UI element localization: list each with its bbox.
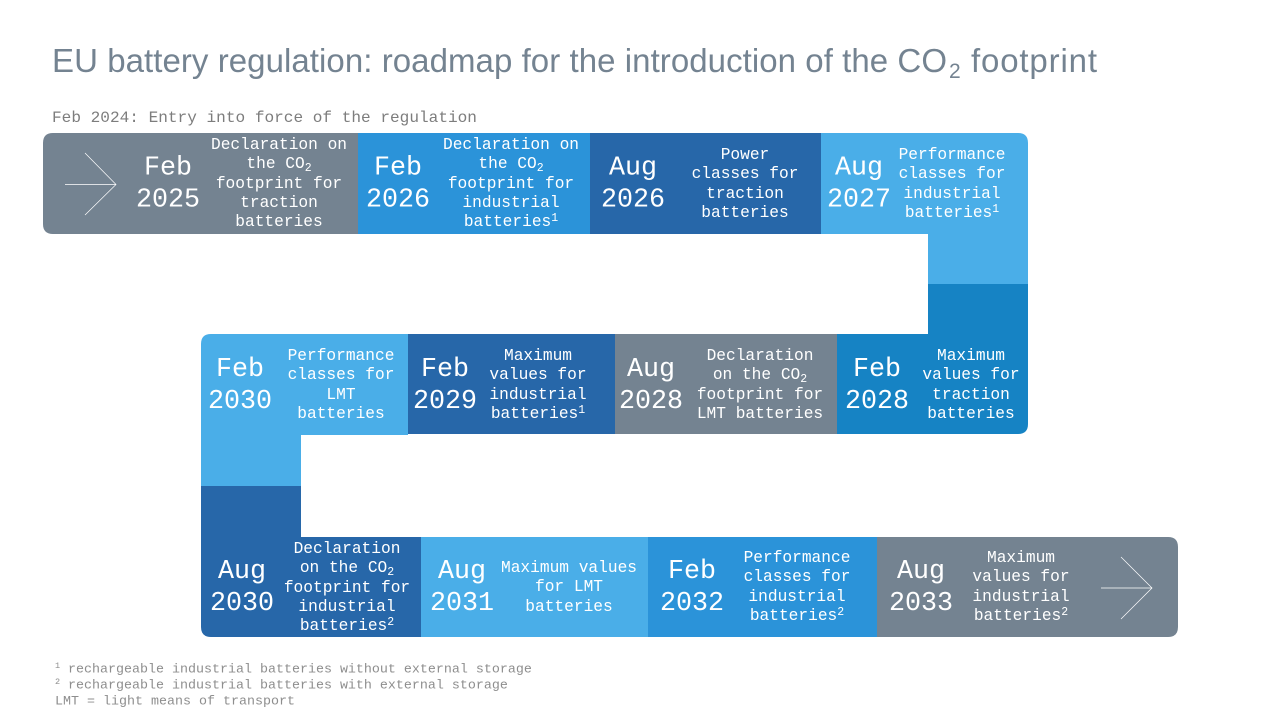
step: Feb 2026 industrial declaration: Declaration on: [443, 136, 579, 154]
step: Aug 2030 industrial declaration: 2: [387, 616, 394, 629]
step: Aug 2030 industrial declaration: industrial: [298, 598, 396, 616]
step: Feb 2026 industrial declaration: [358, 133, 590, 234]
step: Feb 2029 industrial maximum values: Maximum: [504, 347, 572, 365]
step: Aug 2028 LMT declaration: Aug: [627, 355, 675, 385]
step: Aug 2030 industrial declaration: 2030: [210, 589, 274, 619]
step: Aug 2033 industrial maximum values: industrial: [972, 588, 1070, 606]
description: Declaration on: [211, 136, 347, 154]
step: Aug 2033 industrial maximum values: 2: [1061, 606, 1068, 619]
footnotes: LMT = light means of transport: [55, 694, 295, 710]
step: Aug 2033 industrial maximum values: [877, 537, 1178, 637]
title: footprint: [971, 42, 1097, 79]
step: Feb 2029 industrial maximum values: industrial: [489, 386, 587, 404]
step: Aug 2027 industrial performance classes: classes for: [899, 165, 1005, 183]
title: 2: [949, 60, 961, 83]
description: traction: [240, 194, 318, 212]
step: Feb 2029 industrial maximum values: Feb: [421, 355, 469, 385]
step: Aug 2028 LMT declaration: 2: [800, 373, 807, 386]
description: the CO: [246, 155, 312, 175]
footnotes: 2: [55, 677, 60, 687]
step: Aug 2031 LMT maximum values: Maximum values: [501, 559, 637, 577]
step: Aug 2030 industrial declaration: footprint for: [284, 579, 410, 597]
step: Aug 2026 traction power classes: classes for: [692, 165, 798, 183]
step: Aug 2028 LMT declaration: LMT batteries: [697, 405, 823, 423]
step: Aug 2026 traction power classes: [590, 133, 821, 234]
step: Aug 2030 industrial declaration: Aug: [218, 557, 266, 587]
step: Feb 2030 LMT performance classes: Performance: [288, 347, 394, 365]
step: Aug 2028 LMT declaration: footprint for: [697, 386, 823, 404]
step: Feb 2029 industrial maximum values: [408, 334, 615, 434]
step: Aug 2027 industrial performance classes: Performance: [899, 146, 1005, 164]
footnotes: [55, 661, 532, 710]
step: Feb 2026 industrial declaration: 2: [537, 162, 544, 175]
step: Feb 2032 industrial performance classes: [648, 537, 877, 637]
step: Feb 2029 industrial maximum values: 1: [578, 404, 585, 417]
step: Feb 2030 LMT performance classes: Feb: [216, 355, 264, 385]
step: Aug 2030 industrial declaration: [201, 486, 421, 637]
step: Aug 2033 industrial maximum values: Maximum: [987, 549, 1055, 567]
step: Aug 2026 traction power classes: traction: [706, 185, 784, 203]
step: Feb 2032 industrial performance classes: industrial: [748, 588, 846, 606]
step: Feb 2028 traction maximum values: [837, 284, 1028, 434]
footnotes: rechargeable industrial batteries without external storage: [68, 662, 532, 678]
step: Feb 2028 traction maximum values: values for: [922, 366, 1020, 384]
step: Aug 2031 LMT maximum values: [421, 537, 648, 637]
step: Feb 2032 industrial performance classes: Feb: [668, 557, 716, 587]
description: 2: [305, 162, 312, 175]
step: Aug 2031 LMT maximum values: for LMT: [535, 578, 603, 596]
step: Aug 2030 industrial declaration: 2: [387, 566, 394, 579]
step: Feb 2026 industrial declaration: industrial: [462, 194, 560, 212]
step: Feb 2030 LMT performance classes: classes for: [288, 366, 394, 384]
step: Feb 2032 industrial performance classes: 2032: [660, 589, 724, 619]
title: EU battery regulation: roadmap for the introduction of the CO: [52, 42, 947, 79]
icon: end arrow: [1101, 557, 1152, 619]
step: Feb 2026 industrial declaration: footprint for: [448, 175, 574, 193]
step: Aug 2031 LMT maximum values: Aug: [438, 557, 486, 587]
step: Feb 2029 industrial maximum values: batteries: [491, 404, 585, 423]
step: Aug 2027 industrial performance classes: 2027: [827, 186, 891, 216]
step: Aug 2033 industrial maximum values: Aug: [897, 557, 945, 587]
step: Aug 2028 LMT declaration: on the CO: [713, 366, 807, 386]
subtitle: entry into force: Feb 2024: Entry into force of the regulation: [52, 109, 477, 127]
step: Aug 2033 industrial maximum values: values for: [972, 568, 1070, 586]
step: Aug 2028 LMT declaration: Declaration: [707, 347, 813, 365]
step: Aug 2027 industrial performance classes: 1: [992, 203, 999, 216]
step: Aug 2027 industrial performance classes: industrial: [903, 185, 1001, 203]
step: Feb 2029 industrial maximum values: values for: [489, 366, 587, 384]
step: Feb 2028 traction maximum values: batteries: [927, 405, 1015, 423]
step: Aug 2026 traction power classes: 2026: [601, 186, 665, 216]
step: Feb 2032 industrial performance classes: classes for: [744, 568, 850, 586]
icon: start arrow: [65, 153, 116, 215]
step: Feb 2028 traction maximum values: Maximum: [937, 347, 1005, 365]
step: Feb 2026 industrial declaration: batteries: [464, 212, 558, 231]
step: Aug 2030 industrial declaration: on the CO: [300, 559, 394, 579]
step: Aug 2030 industrial declaration: batteries: [300, 616, 394, 635]
step: Feb 2030 LMT performance classes: [201, 334, 408, 486]
step: Feb 2026 industrial declaration: the CO: [478, 155, 544, 175]
step: Feb 2032 industrial performance classes: Performance: [744, 549, 850, 567]
step: Aug 2027 industrial performance classes: batteries: [905, 203, 999, 222]
footnotes: rechargeable industrial batteries with external storage: [68, 678, 508, 694]
step: Feb 2029 industrial maximum values: 2029: [413, 387, 477, 417]
step: Feb 2028 traction maximum values: 2028: [845, 387, 909, 417]
date: Feb: [144, 154, 192, 184]
step: Feb 2026 industrial declaration: 1: [551, 212, 558, 225]
step: Aug 2033 industrial maximum values: 2033: [889, 589, 953, 619]
description: footprint for: [216, 175, 342, 193]
step: Feb 2028 traction maximum values: traction: [932, 386, 1010, 404]
step: Aug 2026 traction power classes: Power: [721, 146, 769, 164]
step: Feb 2026 industrial declaration: Feb: [374, 154, 422, 184]
step: Feb 2030 LMT performance classes: 2030: [208, 387, 272, 417]
step: Aug 2030 industrial declaration: Declaration: [294, 540, 400, 558]
step: Aug 2031 LMT maximum values: batteries: [525, 598, 613, 616]
step: Aug 2026 traction power classes: batteries: [701, 204, 789, 222]
step: Feb 2025 traction declaration: [43, 133, 358, 234]
step: Aug 2028 LMT declaration: [615, 334, 837, 434]
footnotes: 1: [55, 661, 60, 671]
description: batteries: [235, 213, 323, 231]
step: Feb 2032 industrial performance classes: batteries: [750, 606, 844, 625]
step: Aug 2027 industrial performance classes: Aug: [835, 154, 883, 184]
step: Feb 2032 industrial performance classes: 2: [837, 606, 844, 619]
date: 2025: [136, 186, 200, 216]
step: Aug 2031 LMT maximum values: 2031: [430, 589, 494, 619]
step: Feb 2030 LMT performance classes: LMT: [326, 386, 356, 404]
step: Aug 2027 industrial performance classes: [821, 133, 1028, 284]
step: Aug 2033 industrial maximum values: batteries: [974, 606, 1068, 625]
step: Aug 2028 LMT declaration: 2028: [619, 387, 683, 417]
step: Feb 2028 traction maximum values: Feb: [853, 355, 901, 385]
step: Aug 2026 traction power classes: Aug: [609, 154, 657, 184]
step: Feb 2030 LMT performance classes: batteries: [297, 405, 385, 423]
step: Feb 2026 industrial declaration: 2026: [366, 186, 430, 216]
